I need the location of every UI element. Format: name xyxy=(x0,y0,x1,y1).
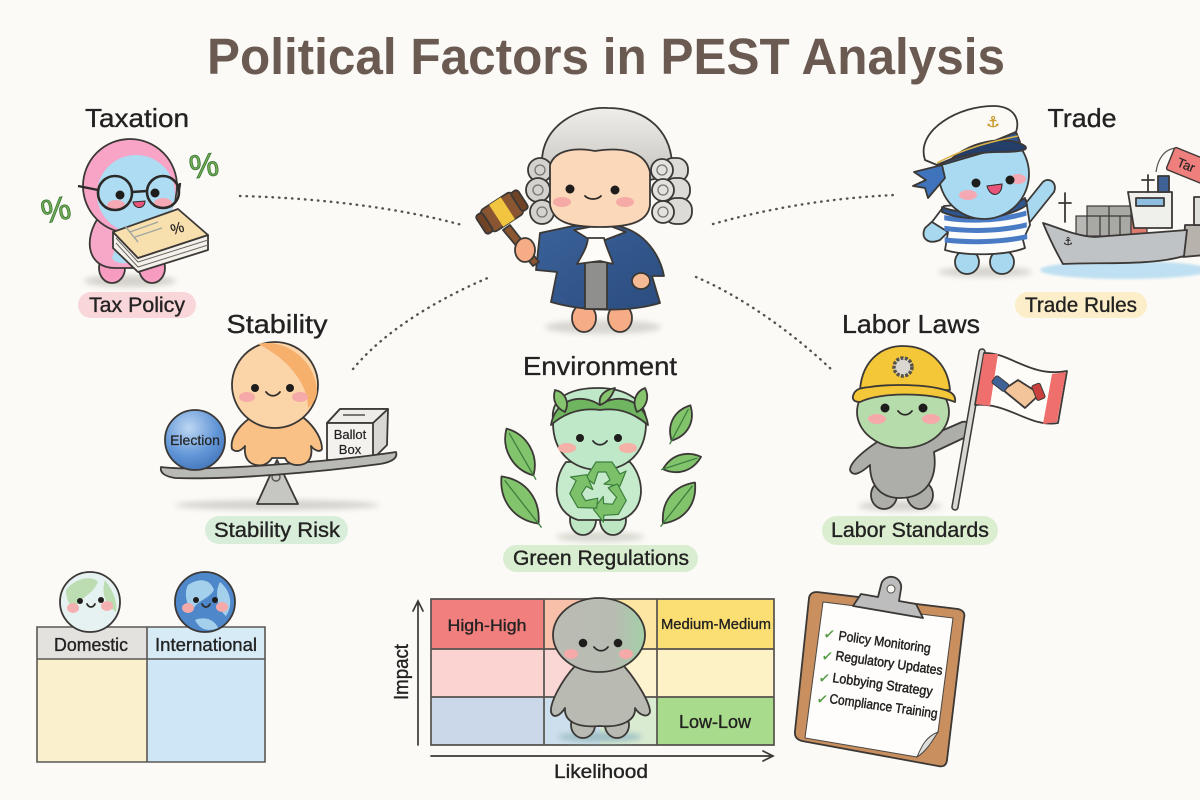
label pill: tax policy: Tax Policy xyxy=(89,294,186,317)
icon: recycling arrows xyxy=(563,462,631,527)
text: domestic: Domestic xyxy=(54,635,128,655)
panel: environment xyxy=(491,351,704,572)
panel: domestic vs international table xyxy=(37,572,265,762)
face xyxy=(550,149,650,227)
panel: labor laws xyxy=(822,309,1067,545)
checklist xyxy=(815,626,944,721)
item: compliance training: Compliance Training xyxy=(829,691,939,721)
character: green mascot with recycling symbol xyxy=(551,388,648,542)
character: hard hat mascot xyxy=(850,346,971,511)
connector: stability to centre xyxy=(353,277,490,369)
icon: leaf lower right xyxy=(652,476,704,534)
heading: labor laws: Labor Laws xyxy=(842,309,980,339)
icon: flag with handshake xyxy=(955,352,1067,507)
title: Political Factors in PEST Analysis xyxy=(207,28,1005,85)
label pill: stability risk: Stability Risk xyxy=(214,519,341,542)
item: policy monitoring: ✓ xyxy=(822,626,836,644)
captain hat xyxy=(924,106,1026,165)
icon: green percent right: % xyxy=(187,145,221,186)
wig xyxy=(542,108,672,180)
heading: trade: Trade xyxy=(1048,103,1116,133)
panel: impact likelihood risk matrix xyxy=(391,598,774,783)
captain hat: ⚓ xyxy=(986,113,1000,131)
leaf crown xyxy=(551,388,648,425)
item: policy monitoring: Policy Monitoring xyxy=(838,628,932,656)
character: sailor mascot xyxy=(913,106,1055,277)
item: regulatory updates: ✓ xyxy=(820,648,834,666)
matrix grid xyxy=(431,599,774,745)
item: lobbying strategy: ✓ xyxy=(817,670,831,688)
icon: green percent left: % xyxy=(38,188,74,231)
panel: compliance clipboard xyxy=(795,577,964,766)
axis label: impact: Impact xyxy=(391,644,413,700)
label pill: green regulations: Green Regulations xyxy=(513,547,689,570)
ballot box xyxy=(327,409,388,460)
label pill: stability risk xyxy=(205,516,348,544)
connector: taxation to centre xyxy=(240,196,462,225)
heading: environment: Environment xyxy=(523,351,678,381)
illustration: cargo ship and water xyxy=(1040,147,1200,279)
tariff tag xyxy=(1166,147,1200,192)
gavel xyxy=(474,187,539,266)
hard hat xyxy=(853,346,955,402)
item: compliance training: ✓ xyxy=(815,691,829,709)
clipboard board xyxy=(795,592,964,766)
bandana xyxy=(913,165,945,198)
heading: taxation: Taxation xyxy=(85,103,189,133)
table cell fills xyxy=(37,627,265,762)
icon: domestic globe xyxy=(60,572,120,632)
robe xyxy=(536,226,664,310)
icon: leaf upper left xyxy=(497,423,546,485)
axis label: likelihood: Likelihood xyxy=(554,762,648,783)
connector: labor laws to centre xyxy=(696,277,832,370)
label pill: trade rules: Trade Rules xyxy=(1025,294,1137,317)
panel: taxation xyxy=(38,103,221,318)
label pill: labor standards: Labor Standards xyxy=(831,519,989,542)
icon: leaf middle right xyxy=(659,449,704,478)
ballot box: Box xyxy=(339,442,362,457)
heading: stability: Stability xyxy=(226,309,328,339)
panel: stability xyxy=(161,309,396,544)
character: tax mascot with papers xyxy=(78,139,208,287)
election ball xyxy=(165,410,225,470)
illustration: mascot on seesaw xyxy=(161,342,396,510)
matrix cell fills xyxy=(431,599,774,745)
axis: likelihood arrow xyxy=(431,751,773,761)
character: grey-green mascot xyxy=(551,598,650,742)
handshake xyxy=(991,375,1046,408)
item: regulatory updates: Regulatory Updates xyxy=(835,648,944,678)
panel: trade xyxy=(913,103,1200,318)
axis: impact arrow xyxy=(413,601,423,745)
icon: international globe xyxy=(175,572,235,632)
item: lobbying strategy: Lobbying Strategy xyxy=(832,670,934,699)
election ball: Election xyxy=(170,432,220,448)
text: low-low: Low-Low xyxy=(679,712,752,732)
paper sheet xyxy=(805,602,953,757)
character: tax mascot with papers: % xyxy=(169,219,186,239)
text: high-high: High-High xyxy=(448,616,526,635)
icon: leaf upper right xyxy=(662,401,698,448)
character: judge with gavel xyxy=(474,108,692,334)
text: international: International xyxy=(155,635,257,655)
tariff tag: Tar xyxy=(1175,155,1198,176)
page curl xyxy=(917,732,938,757)
illustration: cargo ship and water: ⚓ xyxy=(1063,235,1073,248)
text: medium-medium: Medium-Medium xyxy=(661,616,771,633)
clip xyxy=(853,577,923,618)
label pill: labor standards xyxy=(822,516,998,545)
table grid xyxy=(37,627,265,762)
second ship at edge xyxy=(1183,225,1200,257)
ballot box: Ballot xyxy=(334,427,367,442)
icon: leaf lower left xyxy=(491,469,552,535)
connector: trade to centre xyxy=(713,195,895,224)
